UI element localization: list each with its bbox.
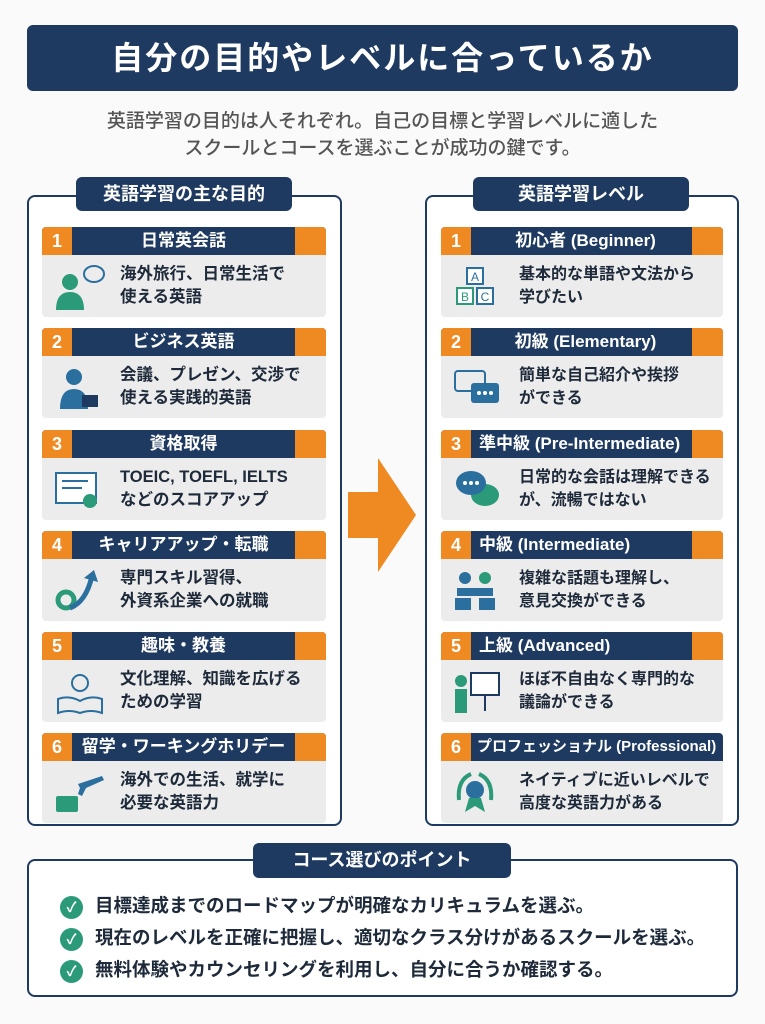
level 6: プロフェッショナル (Professional) bbox=[477, 738, 716, 755]
panel: course points bbox=[27, 859, 738, 997]
panel: purposes bbox=[27, 195, 342, 826]
card 4 bbox=[42, 531, 326, 621]
level 2: ができる bbox=[519, 390, 583, 407]
point 3: ✓ bbox=[66, 963, 77, 979]
level 5: 上級 (Advanced) bbox=[479, 636, 610, 655]
card 1: 使える英語 bbox=[120, 288, 202, 306]
card 5 bbox=[42, 632, 326, 722]
level 3 bbox=[441, 430, 723, 520]
level 3: 3 bbox=[451, 434, 461, 454]
level 1 bbox=[441, 227, 723, 317]
level 1: 1 bbox=[451, 231, 461, 251]
level 4 bbox=[441, 531, 723, 621]
point 2: 現在のレベルを正確に把握し、適切なクラス分けがあるスクールを選ぶ。 bbox=[95, 927, 705, 948]
card 5: ための学習 bbox=[120, 693, 202, 711]
level 1: B bbox=[461, 290, 469, 304]
point 1: ✓ bbox=[66, 899, 77, 915]
level 2: 2 bbox=[451, 332, 461, 352]
card 4: 専門スキル習得、 bbox=[120, 569, 252, 587]
card 1 bbox=[42, 227, 326, 317]
level 6: ネイティブに近いレベルで bbox=[519, 772, 710, 789]
panel tab: purposes bbox=[76, 177, 292, 211]
level 1: 初心者 (Beginner) bbox=[515, 231, 656, 250]
level 3: が、流暢ではない bbox=[519, 492, 647, 509]
level 4: 複雑な話題も理解し、 bbox=[519, 570, 679, 587]
level 5: 5 bbox=[451, 636, 461, 656]
point 1: 目標達成までのロードマップが明確なカリキュラムを選ぶ。 bbox=[95, 895, 594, 916]
panel tab: levels bbox=[473, 177, 689, 211]
card 3 bbox=[42, 430, 326, 520]
card 5: 文化理解、知識を広げる bbox=[120, 670, 302, 688]
card 3: などのスコアアップ bbox=[120, 491, 268, 509]
card 3: TOEIC, TOEFL, IELTS bbox=[120, 468, 288, 486]
level 3: 日常的な会話は理解できる bbox=[519, 469, 711, 486]
title bbox=[27, 25, 738, 91]
card 4: キャリアアップ・転職 bbox=[98, 535, 268, 554]
arrow bbox=[348, 458, 416, 572]
card 6 bbox=[42, 733, 326, 823]
card 2: 会議、プレゼン、交渉で bbox=[120, 366, 301, 384]
card 2: 2 bbox=[52, 332, 62, 352]
card 6: 6 bbox=[52, 737, 62, 757]
level 5: 議論ができる bbox=[519, 694, 615, 711]
panel tab: course points bbox=[253, 843, 511, 878]
card 1: 1 bbox=[52, 231, 62, 251]
level 5 bbox=[441, 632, 723, 722]
subtitle bbox=[107, 110, 658, 159]
point 3: 無料体験やカウンセリングを利用し、自分に合うか確認する。 bbox=[95, 959, 613, 980]
subtitle: 英語学習の目的は人それぞれ。自己の目標と学習レベルに適した bbox=[107, 111, 658, 132]
level 4: 意見交換ができる bbox=[519, 593, 647, 610]
level 1: 学びたい bbox=[519, 289, 583, 306]
card 5: 趣味・教養 bbox=[141, 636, 226, 655]
level 6 bbox=[441, 733, 723, 823]
subtitle: スクールとコースを選ぶことが成功の鍵です。 bbox=[184, 138, 581, 159]
card 2: 使える実践的英語 bbox=[120, 389, 252, 407]
card 3: 資格取得 bbox=[150, 434, 218, 453]
level 2 bbox=[441, 328, 723, 418]
title: 自分の目的やレベルに合っているか bbox=[111, 40, 654, 76]
level 1: 基本的な単語や文法から bbox=[519, 266, 695, 283]
card 4: 4 bbox=[52, 535, 62, 555]
card 4: 外資系企業への就職 bbox=[120, 592, 268, 610]
panel: levels bbox=[425, 195, 739, 826]
level 4: 4 bbox=[451, 535, 461, 555]
level 4: 中級 (Intermediate) bbox=[479, 535, 630, 554]
level 3: 準中級 (Pre-Intermediate) bbox=[479, 434, 680, 453]
card 6: 必要な英語力 bbox=[120, 794, 219, 812]
card 2: ビジネス英語 bbox=[132, 332, 234, 351]
level 6: 高度な英語力がある bbox=[519, 795, 663, 812]
card 2 bbox=[42, 328, 326, 418]
level 2: 初級 (Elementary) bbox=[515, 332, 656, 351]
panel tab: course points: コース選びのポイント bbox=[292, 850, 472, 870]
point 2: ✓ bbox=[66, 931, 77, 947]
level 1: C bbox=[481, 290, 490, 304]
card 3: 3 bbox=[52, 434, 62, 454]
card 1: 海外旅行、日常生活で bbox=[120, 265, 285, 283]
panel tab: purposes: 英語学習の主な目的 bbox=[103, 184, 265, 204]
card 6: 海外での生活、就学に bbox=[120, 771, 285, 789]
level 1: A bbox=[471, 270, 479, 284]
level 2: 簡単な自己紹介や挨拶 bbox=[519, 367, 679, 384]
card 5: 5 bbox=[52, 636, 62, 656]
level 5: ほぼ不自由なく専門的な bbox=[519, 671, 695, 688]
level 6: 6 bbox=[451, 737, 461, 757]
card 6: 留学・ワーキングホリデー bbox=[82, 737, 285, 756]
card 1: 日常英会話 bbox=[141, 231, 226, 250]
panel tab: levels: 英語学習レベル bbox=[518, 184, 644, 204]
